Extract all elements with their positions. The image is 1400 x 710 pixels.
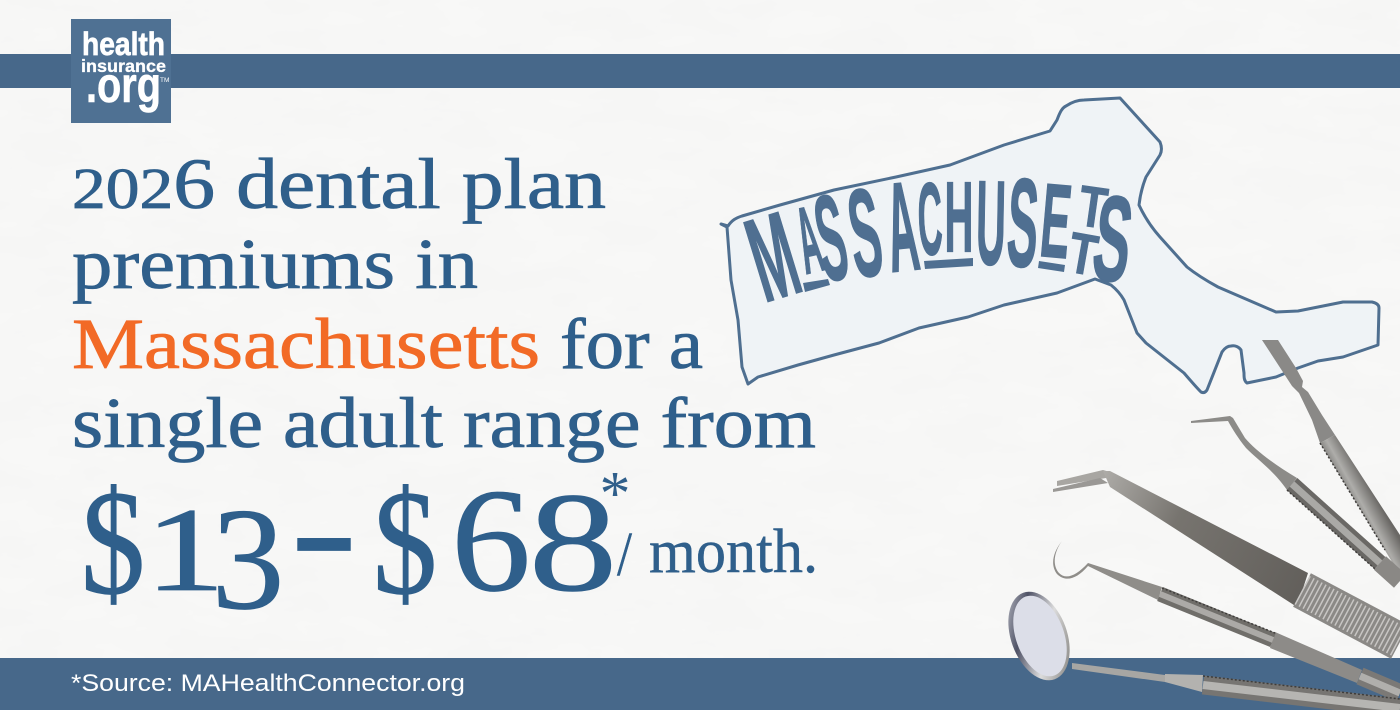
state lettering: C <box>916 163 944 278</box>
state lettering: A <box>880 155 925 300</box>
headline <box>72 144 816 463</box>
state lettering: T <box>1063 221 1102 289</box>
logo: health <box>82 26 165 62</box>
top band <box>0 54 1400 88</box>
state lettering: M <box>732 186 813 328</box>
state lettering <box>732 153 1139 328</box>
state lettering: H <box>945 162 973 274</box>
headline: 2026 dental plan <box>72 144 606 224</box>
price range: 8 <box>529 464 617 621</box>
state lettering: S <box>1086 170 1139 310</box>
state lettering: T <box>1074 174 1111 242</box>
logo <box>71 19 171 123</box>
state lettering: E <box>1036 162 1076 282</box>
logo: insurance <box>81 56 166 76</box>
price range: $ <box>81 460 145 626</box>
price range <box>81 374 630 661</box>
tool: spatula <box>1262 340 1400 575</box>
bottom band <box>0 658 1400 710</box>
tool: dental mirror <box>997 583 1400 708</box>
logo: TM <box>160 77 169 84</box>
per month label: / <box>617 521 633 589</box>
headline: premiums in <box>72 224 478 304</box>
price range: 6 <box>451 459 531 623</box>
price range: 1 <box>144 483 226 616</box>
headline: for a <box>560 304 703 384</box>
price range: – <box>297 374 351 661</box>
state lettering: A <box>786 185 831 294</box>
price range: * <box>600 460 630 528</box>
state lettering: S <box>840 162 890 304</box>
state lettering: S <box>1004 153 1042 295</box>
state lettering: S <box>805 169 857 308</box>
source note: *Source: MAHealthConnector.org <box>71 670 465 697</box>
headline: Massachusetts <box>72 304 540 384</box>
tool: curved explorer <box>1191 416 1400 581</box>
headline: single adult range from <box>72 383 816 463</box>
price range: $ <box>373 460 437 626</box>
Massachusetts state shape <box>721 98 1379 393</box>
price range: 3 <box>212 478 284 640</box>
tool: tweezers <box>1053 470 1400 642</box>
logo: .org <box>86 57 161 113</box>
state lettering: U <box>975 157 1007 291</box>
tool: probe <box>1053 541 1400 693</box>
dental tools <box>997 340 1400 708</box>
per month label: month. <box>649 518 818 586</box>
